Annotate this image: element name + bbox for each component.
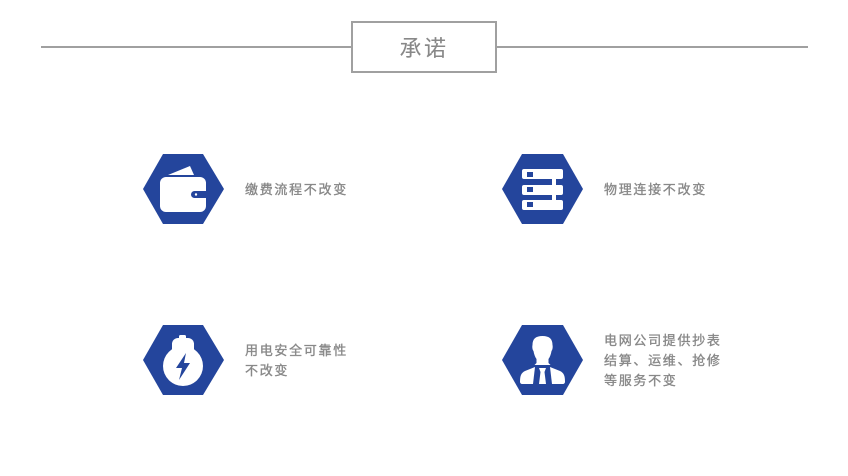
- text: power safety: 不改变: [245, 363, 289, 378]
- text: power safety: [245, 343, 348, 378]
- text: physical connection: 物理连接不改变: [604, 182, 707, 197]
- icon: power bulb hexagon: [143, 325, 224, 395]
- icon: wallet hexagon: [143, 154, 224, 224]
- text: grid company services: 电网公司提供抄表: [604, 333, 722, 348]
- header rule: [41, 46, 808, 48]
- text: payment process: 缴费流程不改变: [245, 182, 348, 197]
- title box: [351, 21, 497, 73]
- text: grid company services: 结算、运维、抢修: [604, 353, 722, 368]
- icon: person in suit hexagon: [502, 325, 583, 395]
- text: power safety: 用电安全可靠性: [245, 343, 348, 358]
- text: grid company services: [604, 333, 722, 388]
- title box: 承诺: [399, 36, 448, 61]
- icon: server stack hexagon: [502, 154, 583, 224]
- text: grid company services: 等服务不变: [604, 373, 678, 388]
